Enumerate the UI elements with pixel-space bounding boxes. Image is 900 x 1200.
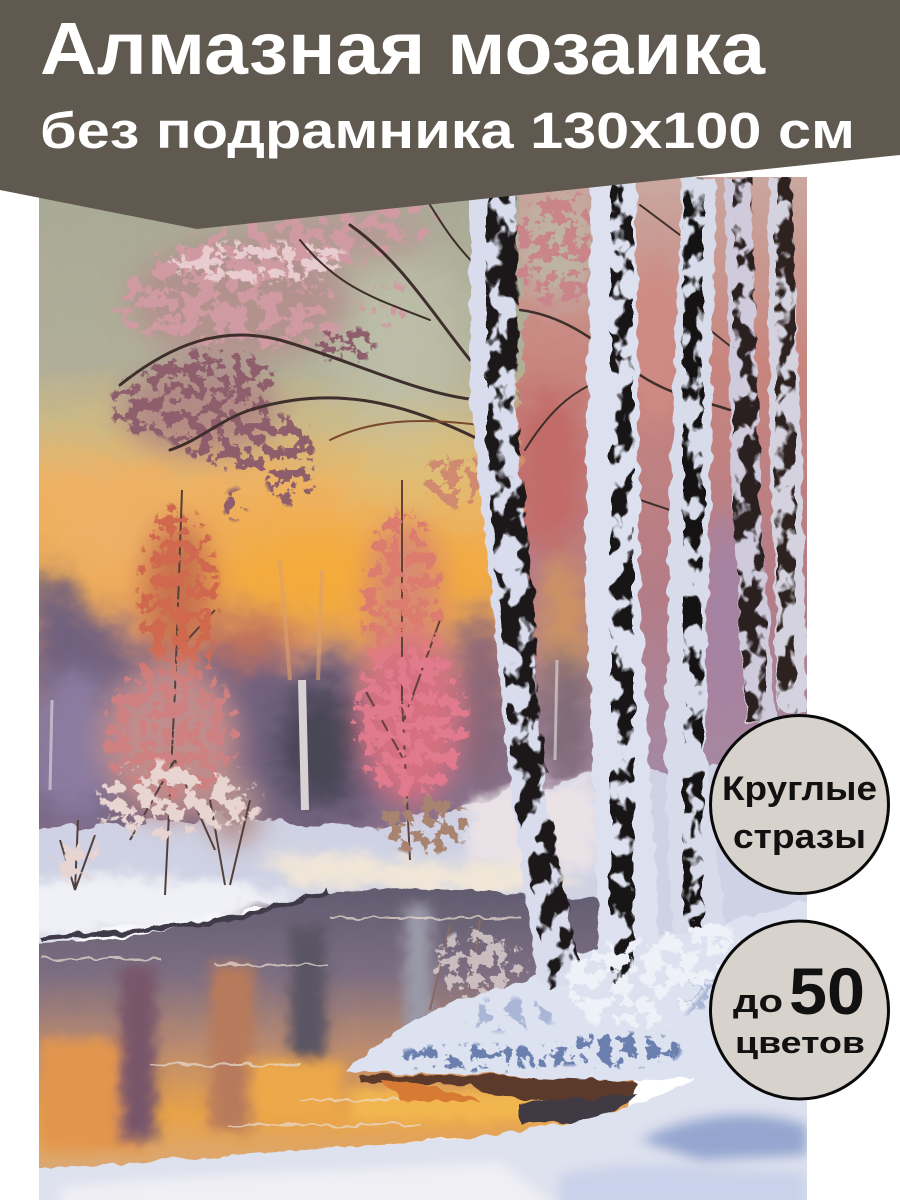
pink tree left — [50, 490, 263, 895]
header banner — [0, 0, 900, 229]
birch trunk 2 — [585, 180, 660, 1010]
badge: up to 50 colours: 50 — [789, 954, 865, 1028]
pink leaves right of the first birch — [516, 192, 592, 307]
badge: round rhinestones — [710, 716, 888, 894]
water with reflections — [20, 889, 640, 1172]
subtitle: без подрамника 130х100 см — [40, 102, 855, 159]
badge: round rhinestones: стразы — [733, 818, 866, 856]
pink foliage canopy — [107, 190, 735, 527]
birch trunk 5 — [768, 177, 806, 712]
pale distant birches — [50, 560, 557, 810]
badge: up to 50 colours — [710, 921, 888, 1099]
bottom snow — [39, 1076, 807, 1200]
badge: up to 50 colours: до — [733, 983, 783, 1019]
header text — [40, 7, 855, 159]
branches — [120, 205, 735, 510]
distant forest — [30, 560, 593, 830]
dark shoreline — [360, 1075, 640, 1125]
snow on tree bases — [560, 920, 745, 1030]
birch trunk 4 — [725, 177, 776, 725]
birch trunk 3 — [665, 177, 725, 935]
badge: up to 50 colours: цветов — [735, 1025, 865, 1060]
sky and distant background — [39, 177, 807, 916]
pink tree centre — [350, 480, 475, 860]
birch trunk 1 — [470, 190, 582, 985]
snowy foreground shore — [345, 895, 820, 1082]
badge: round rhinestones: Круглые — [722, 770, 877, 808]
ice line along the near bank — [40, 890, 330, 940]
snowy bush on the water bank — [429, 920, 530, 1010]
title: Алмазная мозаика — [40, 7, 766, 90]
snow banks — [39, 764, 807, 944]
